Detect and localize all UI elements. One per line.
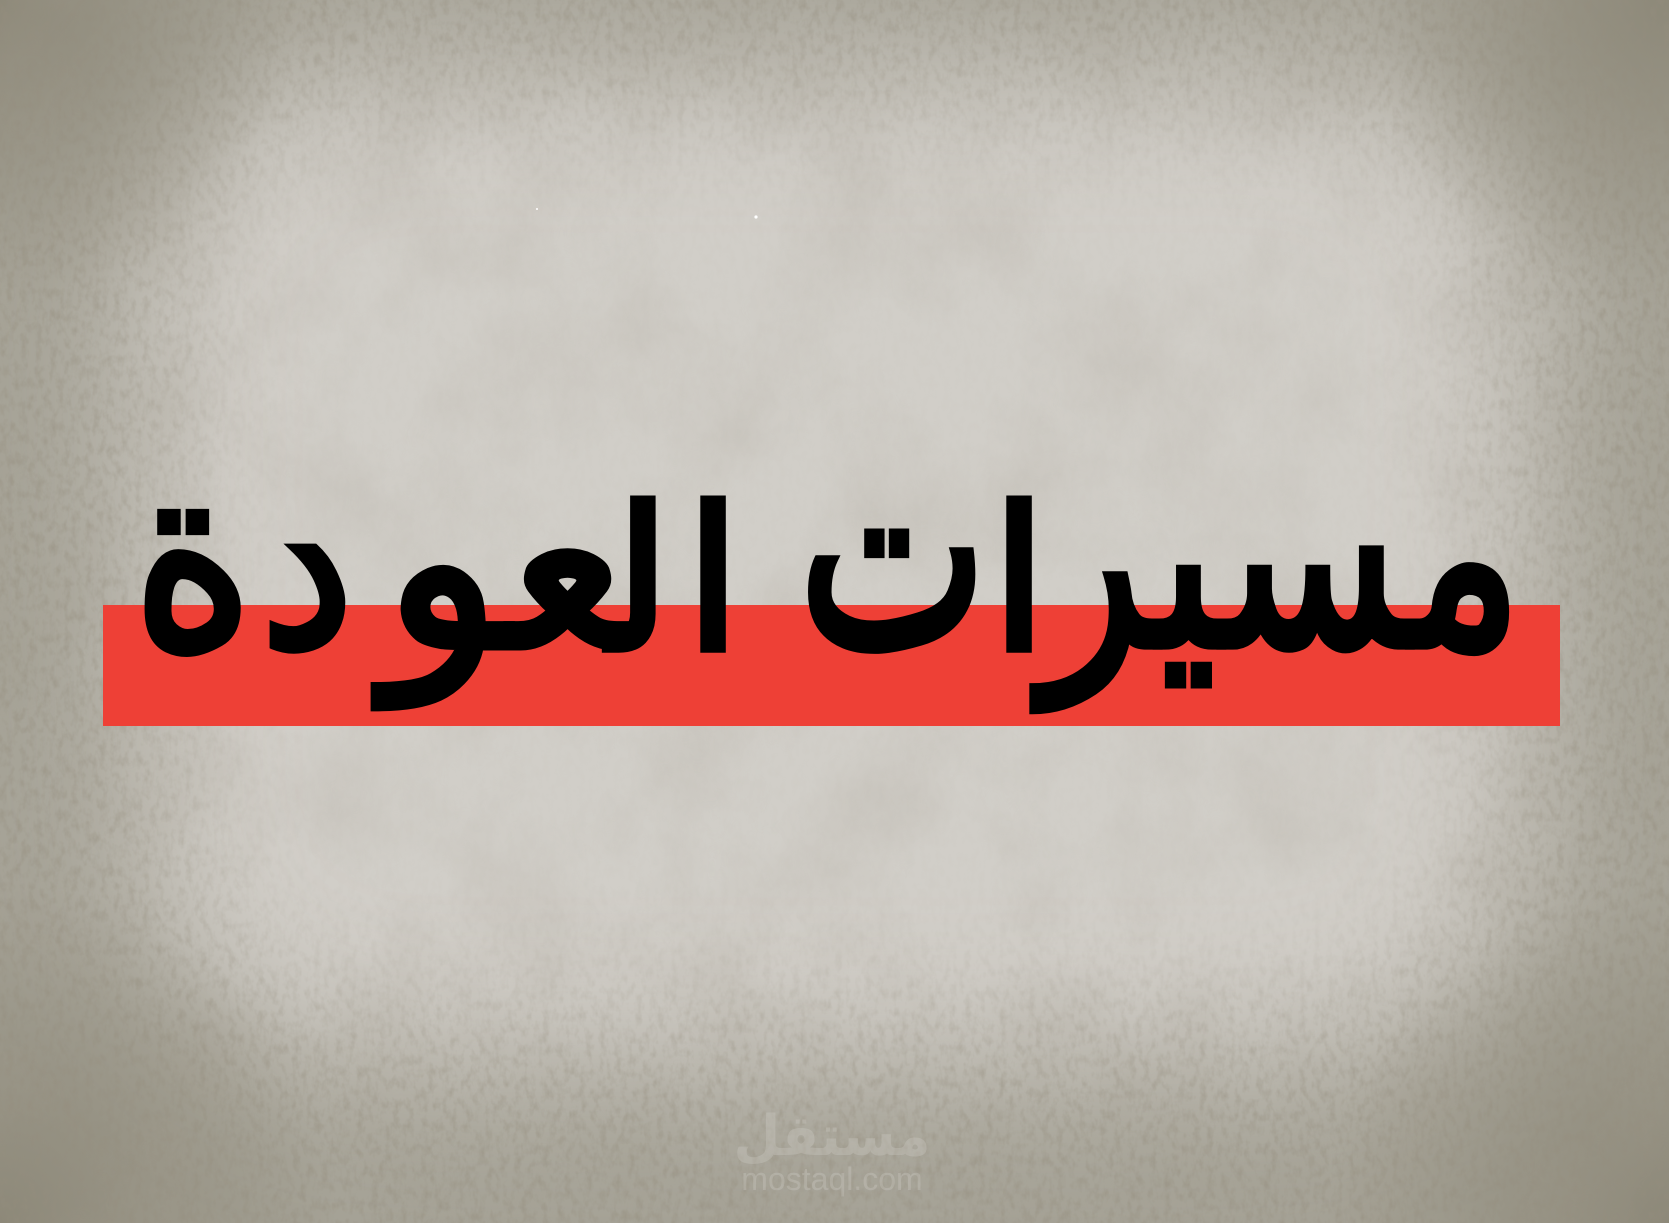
red highlight bar (103, 605, 1560, 726)
watermark (734, 1104, 930, 1197)
title: ة (132, 405, 254, 708)
title: ت (798, 375, 988, 716)
watermark: مستقل (734, 1104, 930, 1169)
watermark: mostaql.com (741, 1161, 923, 1197)
title: ا (683, 465, 743, 698)
title: ل‍ (604, 465, 673, 698)
title (132, 375, 1523, 716)
title: ‍عو (374, 416, 629, 709)
title: د (260, 424, 354, 703)
title: مسير (1031, 401, 1523, 711)
title: ا (989, 465, 1049, 698)
